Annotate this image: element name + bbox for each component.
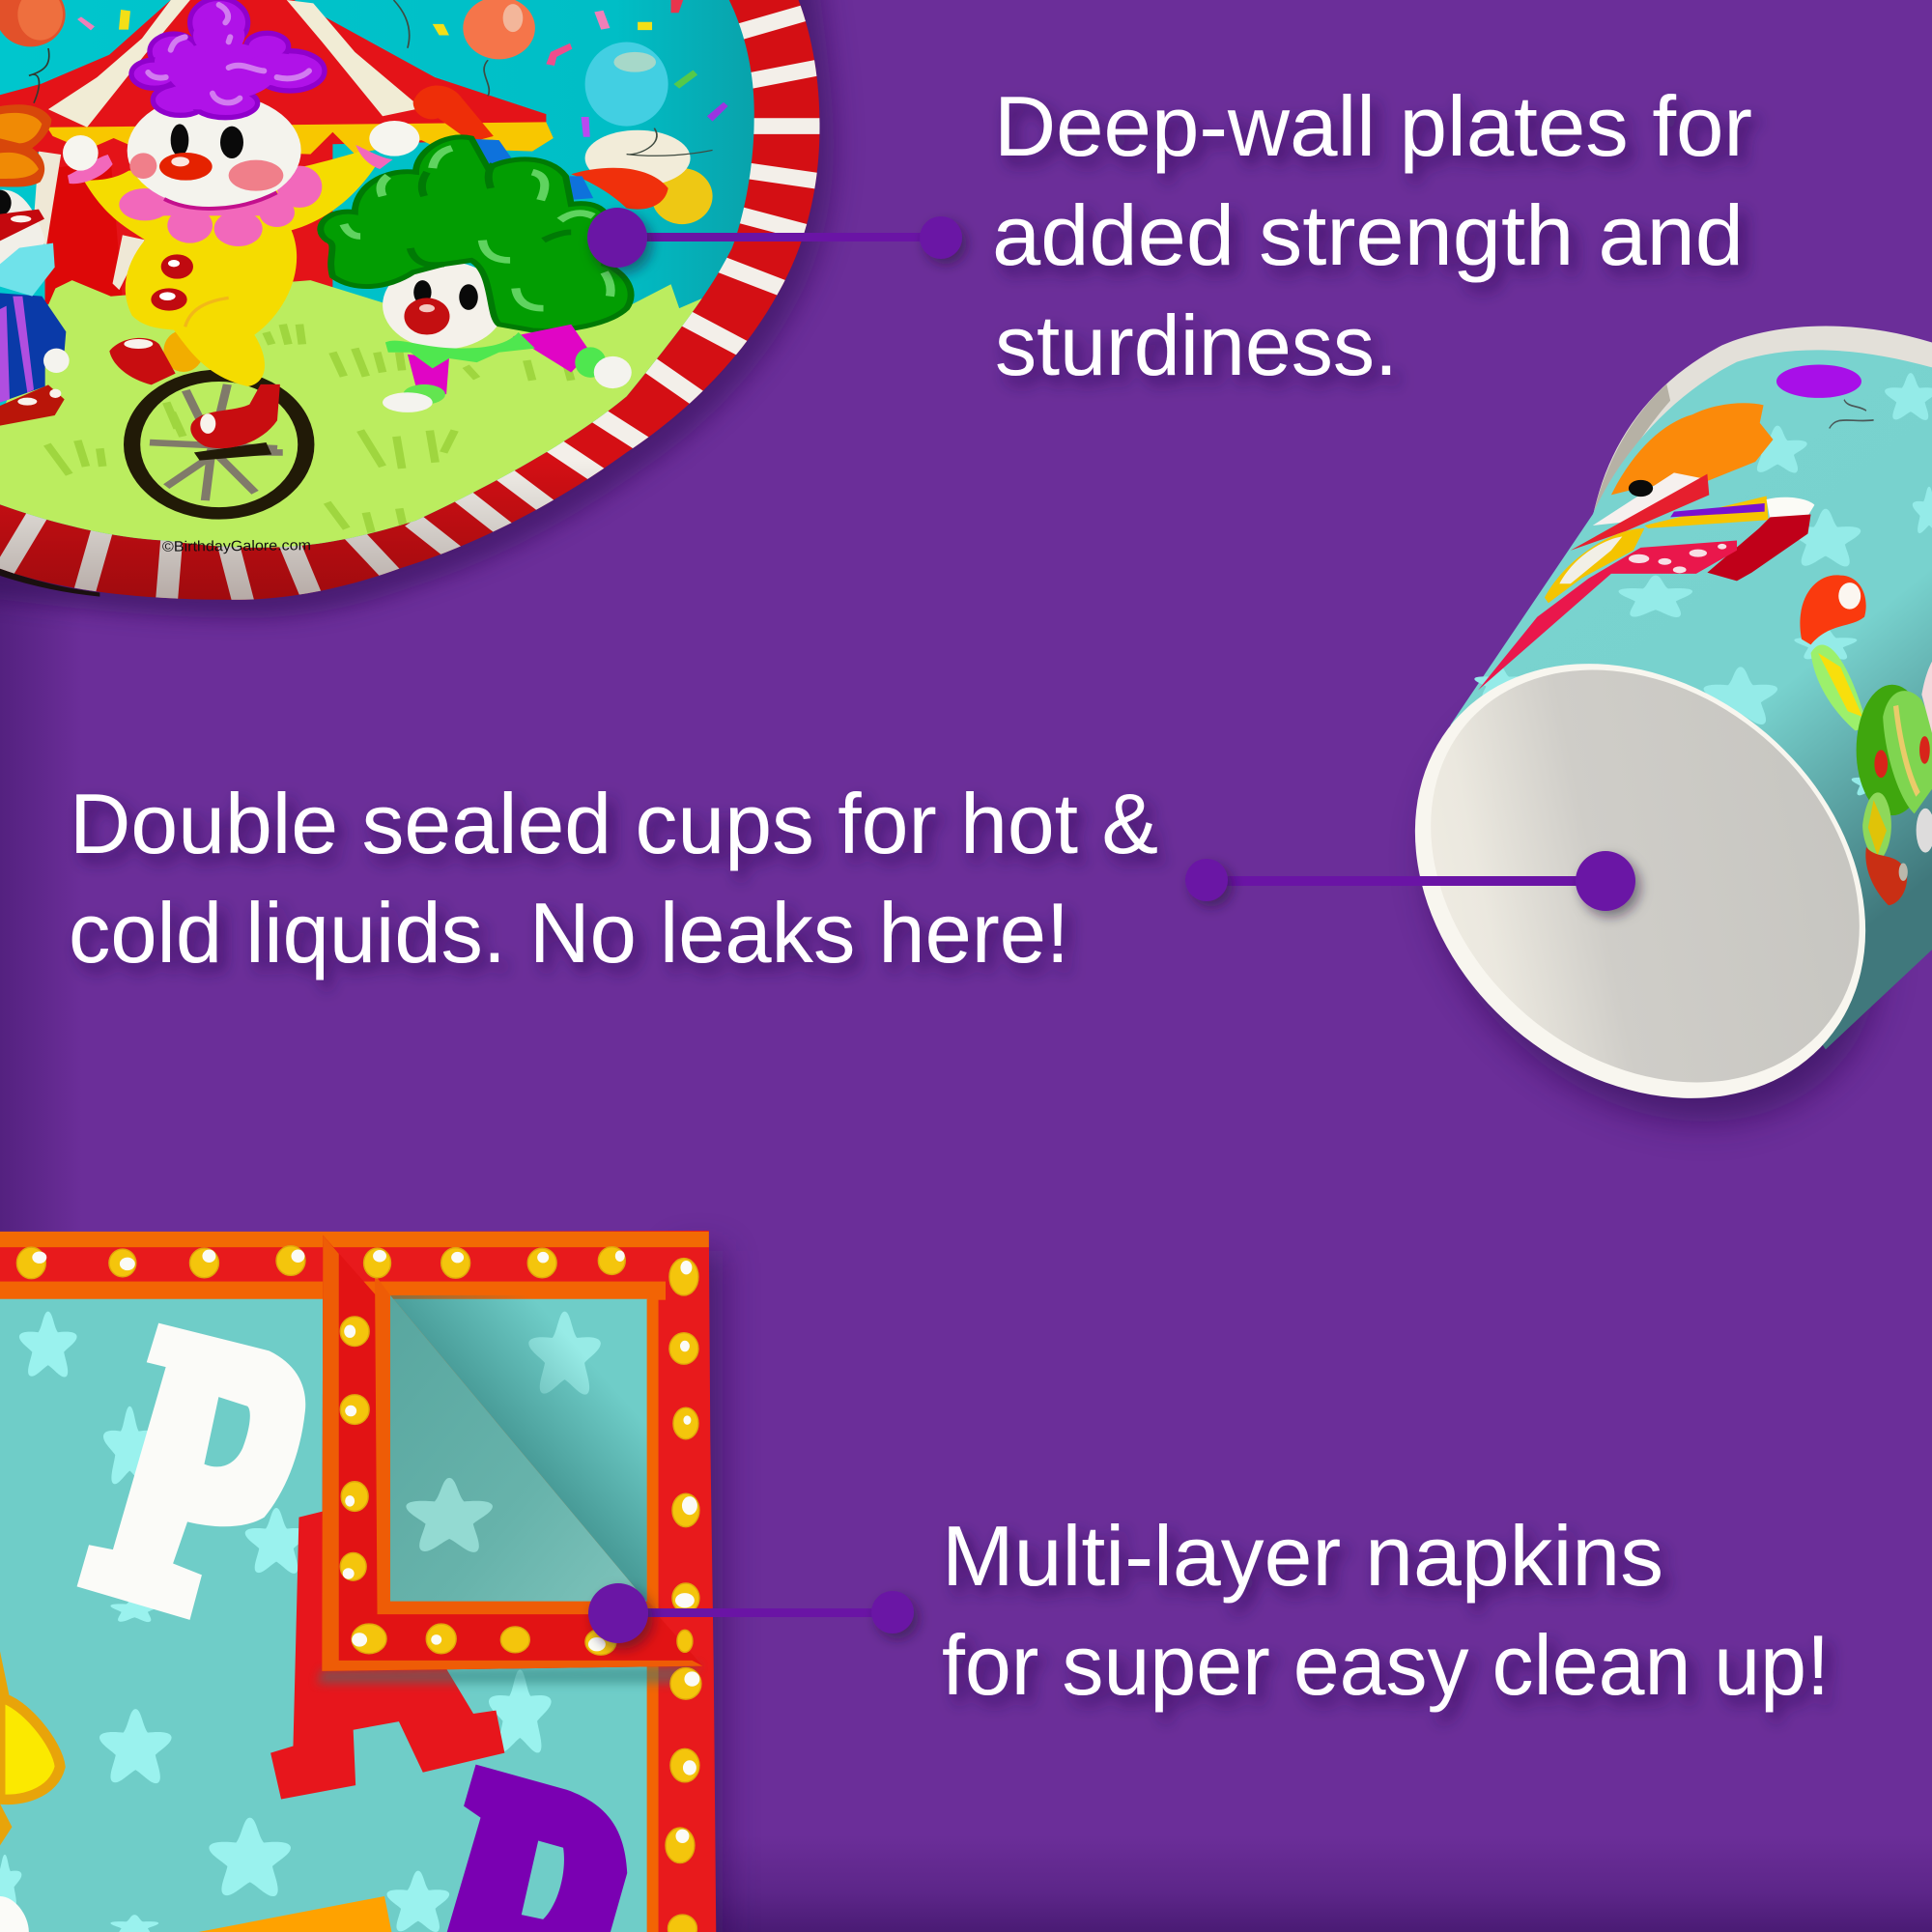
text: cups caption: Double sealed cups for hot & — [70, 776, 1158, 871]
clown purple hair — [131, 0, 325, 118]
napkin stars — [0, 1312, 552, 1932]
connector: napkin — [588, 1583, 914, 1643]
circus tent — [0, 0, 554, 304]
clown yellow body — [84, 152, 377, 386]
panel: paper plate — [0, 0, 838, 618]
connector: plate — [587, 208, 962, 268]
cup body — [1450, 350, 1932, 1049]
clown buttons — [151, 254, 193, 311]
text: cups caption — [69, 776, 1158, 980]
left balloon — [0, 0, 130, 103]
text: plates caption — [992, 78, 1752, 393]
clown hair highlights — [148, 5, 309, 102]
text: plates caption: Deep-wall plates for — [994, 78, 1752, 174]
plate shadow — [0, 0, 834, 618]
napkin sheet — [0, 1231, 716, 1932]
cup clown art — [1478, 364, 1932, 905]
grass — [0, 280, 701, 548]
text: napkins caption: for super easy clean up! — [942, 1617, 1830, 1713]
clown hands — [63, 121, 419, 184]
cup shadow — [1341, 597, 1932, 1211]
clown face features — [129, 124, 283, 191]
clown head — [128, 94, 301, 208]
cup artwork — [1450, 327, 1932, 1049]
clown right shoe — [190, 384, 280, 448]
text: napkins caption — [942, 1508, 1830, 1713]
clown group in fine coordinates — [0, 0, 419, 426]
upper right teal star — [528, 1312, 601, 1395]
napkin letter P — [77, 1323, 305, 1620]
text: napkins caption: Multi-layer napkins — [942, 1508, 1663, 1604]
left clown — [0, 104, 70, 426]
text: plates caption: added strength and — [992, 187, 1744, 283]
shadow under flap — [317, 1665, 701, 1684]
cup lip — [1593, 327, 1932, 517]
unicycle wheel — [132, 376, 306, 513]
folded flap — [322, 1236, 702, 1671]
panel: paper cup — [1327, 327, 1932, 1211]
grass tufts — [47, 325, 571, 532]
text: plates caption: sturdiness. — [995, 298, 1398, 393]
napkin letter bar — [197, 1896, 391, 1932]
yellow shape at left — [0, 1651, 60, 1932]
connector: cup — [1185, 851, 1635, 911]
cup base — [1327, 574, 1932, 1188]
clown: green hair — [321, 137, 632, 412]
napkin letter D — [447, 1765, 627, 1932]
napkin artwork — [0, 1231, 716, 1932]
plate rim with stripes — [0, 0, 838, 609]
bulb highlights — [32, 1250, 699, 1843]
fold shadow — [390, 1295, 647, 1605]
clown left shoe — [109, 338, 176, 384]
plate copyright: ©BirthdayGalore.com — [162, 537, 311, 555]
napkin shadow — [676, 1251, 723, 1932]
napkin bulbs — [16, 1246, 701, 1932]
panel: napkin — [0, 1231, 723, 1932]
napkin letter A — [270, 1506, 504, 1799]
clown mouth — [164, 192, 277, 209]
cup stars — [1474, 373, 1932, 796]
text: cups caption: cold liquids. No leaks here! — [69, 885, 1069, 980]
clown collar — [119, 166, 322, 246]
plate centre artwork — [0, 0, 771, 560]
plate artwork — [0, 0, 838, 609]
balloons and confetti — [394, 0, 728, 224]
